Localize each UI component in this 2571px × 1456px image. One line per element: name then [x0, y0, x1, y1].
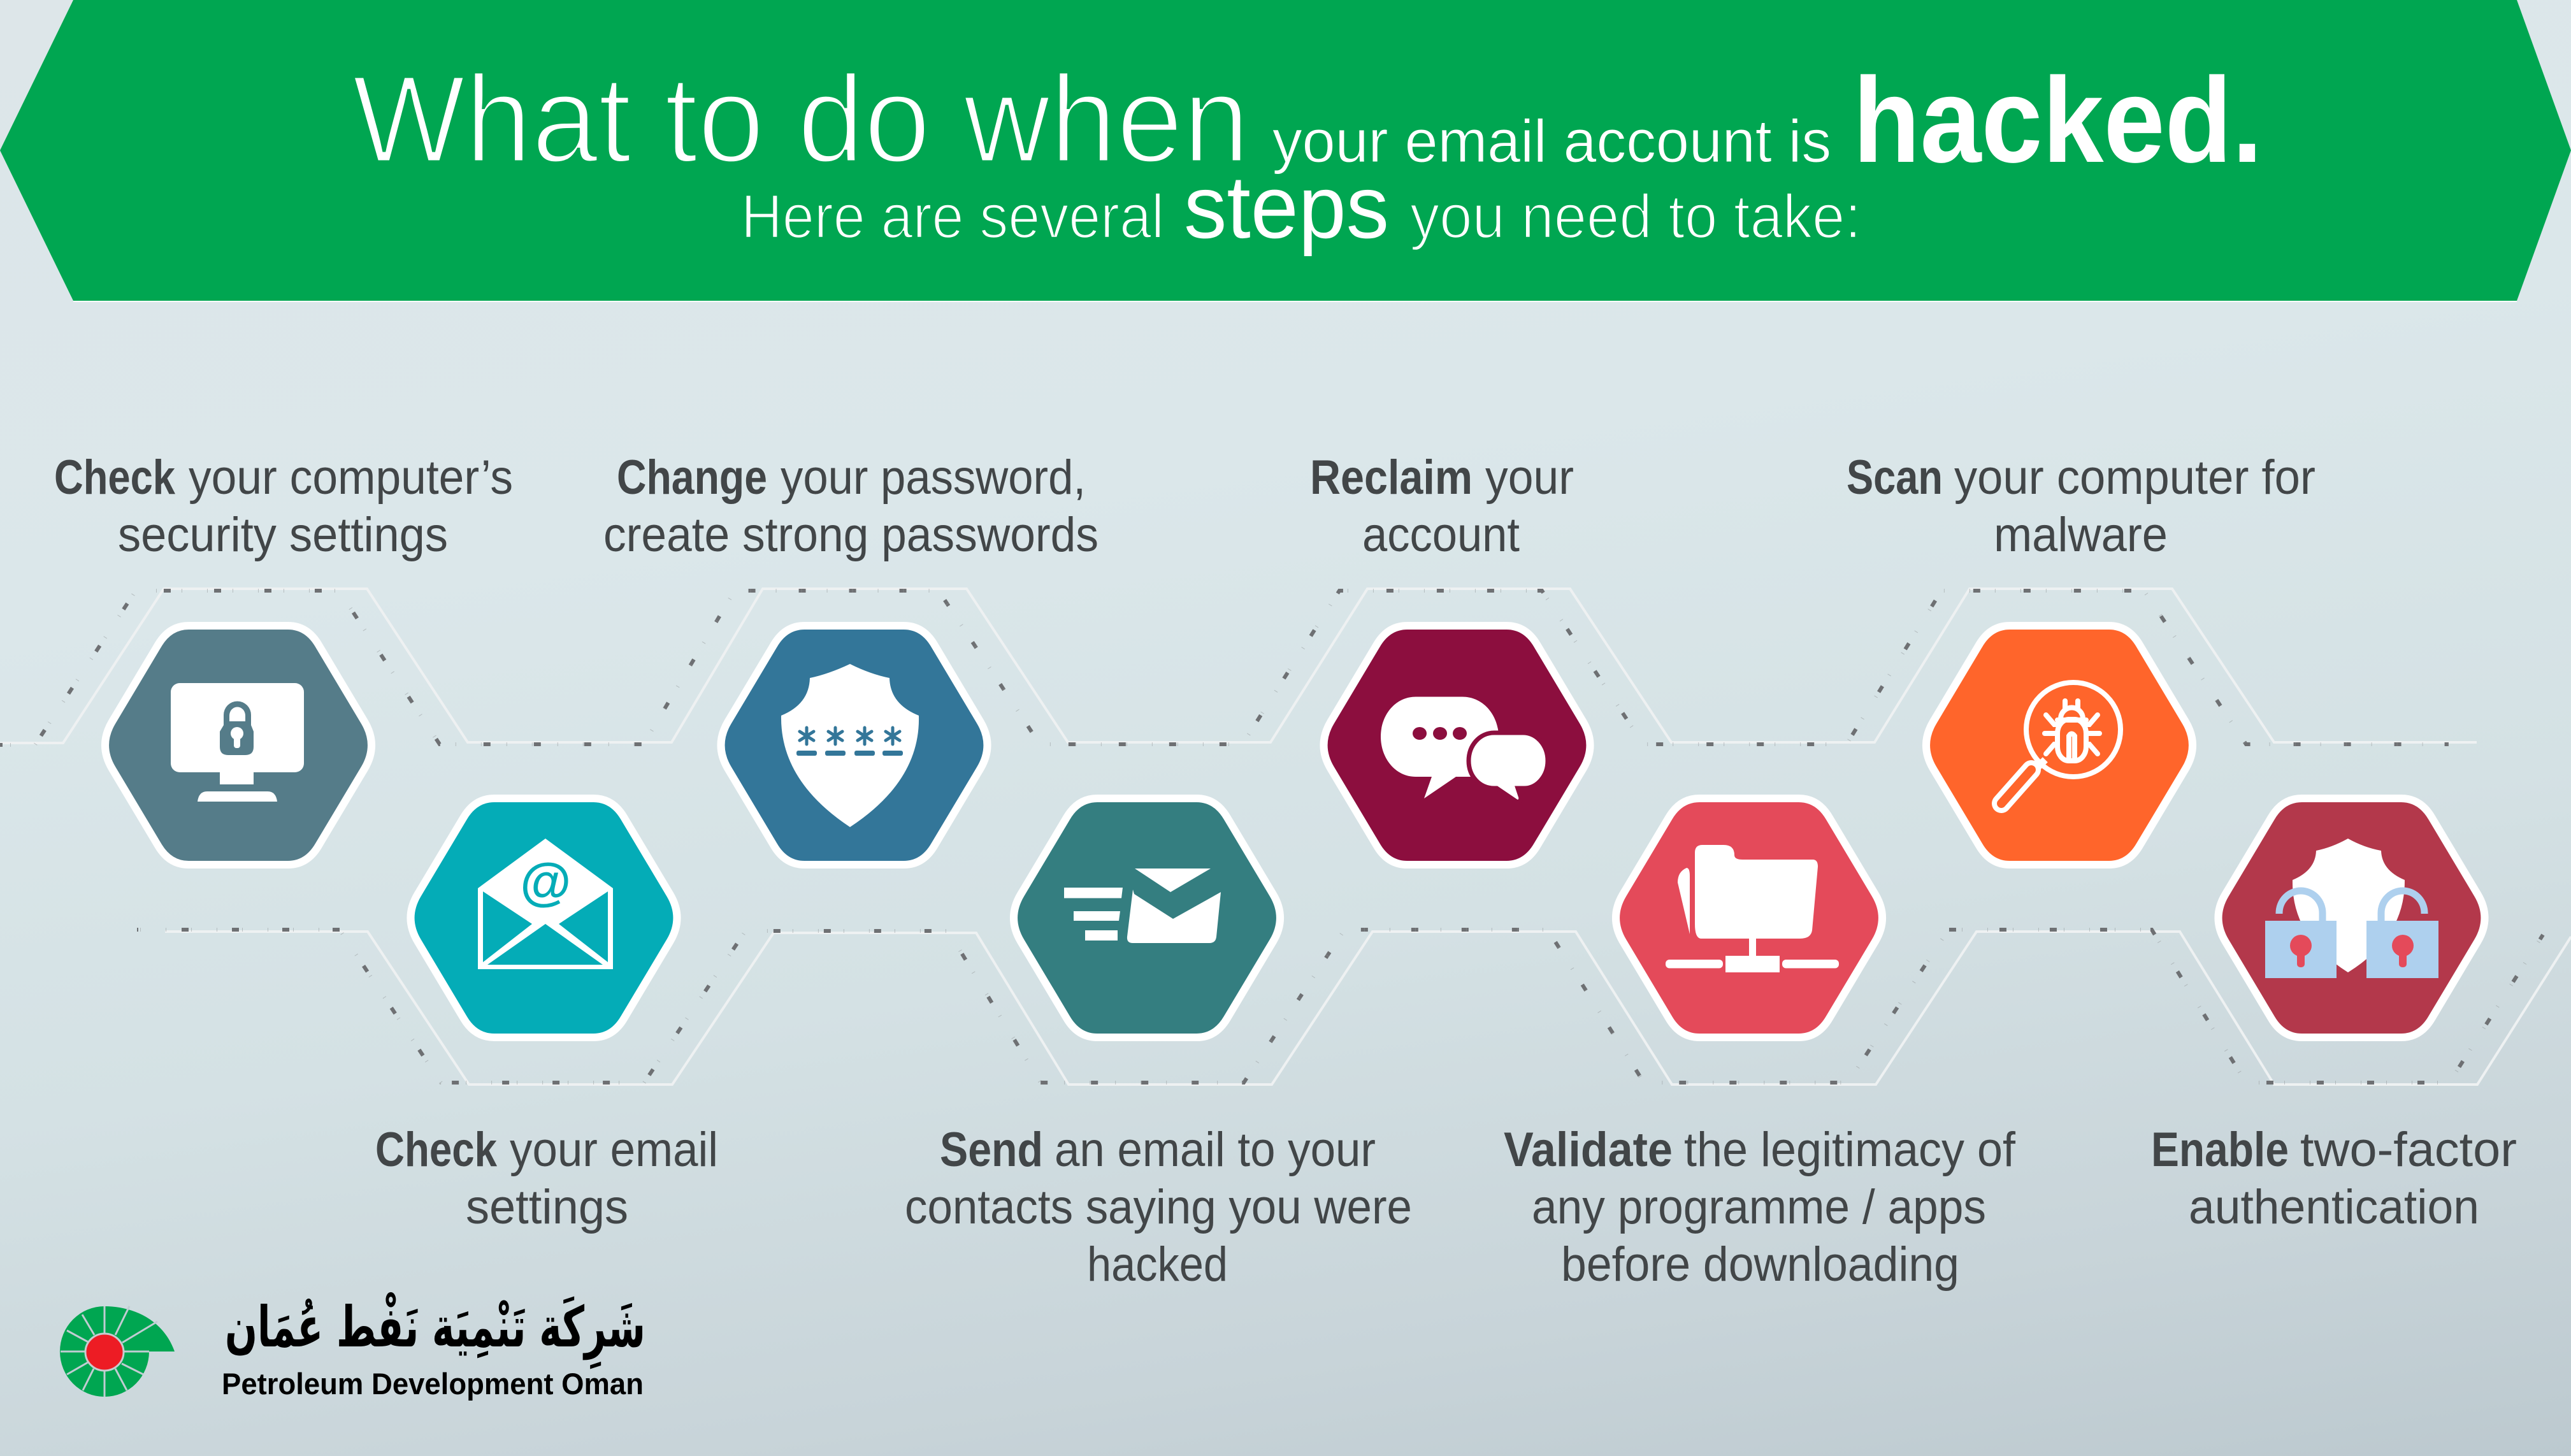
hexagon 4: send email: [1014, 798, 1280, 1037]
step 3 label: your password,: [781, 450, 1086, 505]
step 8 label: authentication: [2189, 1180, 2479, 1234]
step 1 label: your computer’s: [189, 450, 513, 505]
company logo: [60, 1292, 645, 1401]
title line one: your email account is: [1272, 108, 1831, 175]
icon: open envelope with at sign: @: [519, 854, 570, 912]
icon: speech bubbles: [1381, 697, 1548, 802]
title line one: What to do when: [352, 50, 1249, 189]
step 2 label: your email: [510, 1123, 718, 1177]
step 5 label: [1310, 450, 1574, 562]
hexagon 1: computer security: [105, 626, 371, 865]
logo emblem: [60, 1306, 175, 1397]
step 4 label: an email to your: [1055, 1123, 1376, 1177]
step 5 label: Reclaim: [1310, 450, 1473, 505]
icon: network folder: [1666, 845, 1839, 972]
hexagon 8: two-factor authentication: [2219, 798, 2485, 1037]
step 3 label: [603, 450, 1098, 562]
step 8 label: Enable: [2151, 1123, 2289, 1177]
title line two: steps: [1184, 157, 1389, 257]
step 6 label: the legitimacy of: [1684, 1123, 2016, 1177]
step 6 label: [1504, 1123, 2016, 1292]
icon: monitor with padlock: [171, 683, 304, 802]
step 4 label: [905, 1123, 1412, 1292]
icon: open envelope with at sign: [478, 839, 613, 969]
step 1 label: [54, 450, 513, 562]
hexagon 5: reclaim account: [1324, 626, 1590, 865]
step 3 label: Change: [617, 450, 767, 505]
step 2 label: [375, 1123, 718, 1234]
step 1 label: Check: [54, 450, 176, 505]
step 4 label: contacts saying you were: [905, 1180, 1412, 1234]
step 4 label: Send: [940, 1123, 1043, 1177]
step 7 label: [1847, 450, 2315, 562]
step 2 label: settings: [466, 1180, 628, 1234]
step 8 label: [2151, 1123, 2517, 1234]
step 4 label: hacked: [1087, 1237, 1228, 1292]
step 3 label: create strong passwords: [603, 508, 1098, 562]
logo wordmark: Arabic: شَرِكَة تَنْمِيَة نَفْط عُمَان: [225, 1292, 645, 1370]
step 7 label: your computer for: [1954, 450, 2315, 505]
step 5 label: account: [1362, 508, 1520, 562]
step 6 label: Validate: [1504, 1123, 1673, 1177]
title line one: hacked.: [1853, 53, 2263, 188]
header banner: [0, 0, 2571, 302]
step 7 label: malware: [1994, 508, 2168, 562]
icon: shield with two padlocks: [2265, 839, 2438, 978]
title line two: you need to take:: [1410, 182, 1861, 251]
step 7 label: Scan: [1847, 450, 1943, 505]
hexagon 7: scan malware: [1926, 626, 2193, 865]
logo wordmark: English: Petroleum Development Oman: [222, 1367, 644, 1401]
title line one: [352, 50, 2263, 189]
step 5 label: your: [1485, 450, 1574, 505]
icon: flying envelope: [1064, 869, 1221, 943]
network lines: [0, 589, 2571, 1085]
hexagon 3: change password: [721, 626, 988, 865]
step 6 label: any programme / apps: [1532, 1180, 1986, 1234]
hexagon 6: validate programme: [1616, 798, 1882, 1037]
icon: magnifier with bug: [2001, 682, 2121, 804]
title line two: [741, 157, 1861, 257]
icon: shield with password: [781, 664, 919, 827]
step 6 label: before downloading: [1561, 1237, 1959, 1292]
hexagon 2: email settings: [410, 798, 677, 1037]
step 8 label: two-factor: [2300, 1123, 2517, 1177]
step 2 label: Check: [375, 1123, 498, 1177]
step 1 label: security settings: [118, 508, 448, 562]
title line two: Here are several: [741, 182, 1164, 251]
